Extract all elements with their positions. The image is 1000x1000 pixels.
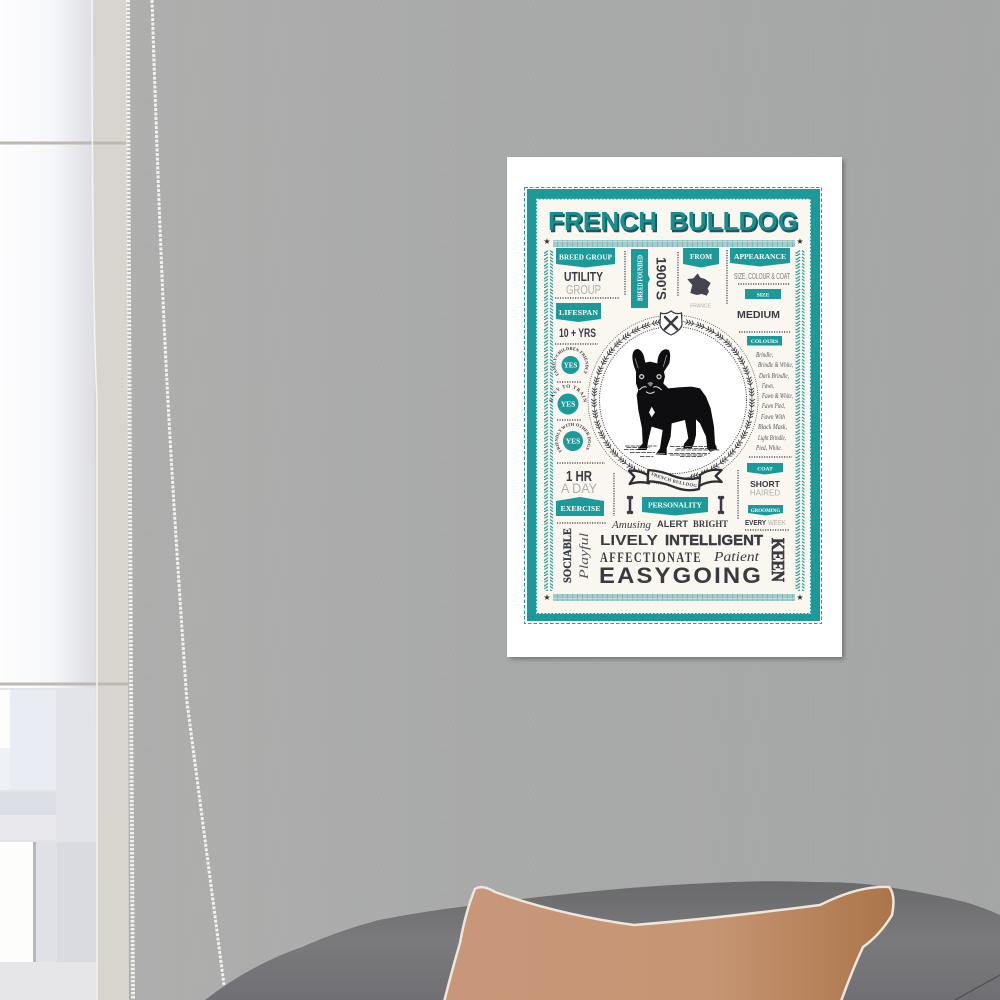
text: 1900s: 1900'S — [654, 257, 670, 300]
dog silhouette — [632, 349, 717, 455]
armchair — [205, 881, 1000, 1000]
ground hatching — [624, 446, 720, 457]
icon: left bone — [629, 499, 631, 511]
badge: family friendly: YES — [564, 362, 577, 370]
label: size — [745, 289, 781, 299]
word cloud: personality traits: SOCIABLE — [560, 528, 574, 583]
panel: poster — [507, 157, 842, 657]
text: short haired: HAIRED — [750, 488, 780, 498]
label: personality — [642, 497, 708, 516]
badge: easy to train — [549, 384, 587, 414]
text: 10 + yrs: 10 + YRS — [559, 326, 596, 340]
label: exercise — [556, 497, 604, 516]
star ornaments: ★ — [543, 237, 551, 246]
bottom stripe bar — [553, 594, 795, 601]
list: colours: Pied, White. — [755, 444, 782, 452]
ribbon: french bulldog — [628, 468, 723, 492]
map: france — [687, 273, 711, 310]
title: FRENCH — [550, 208, 658, 238]
map: france: FRANCE — [690, 304, 711, 310]
list: colours: Fawn With — [760, 413, 785, 421]
list: colours: Fawn & White, — [761, 392, 793, 400]
label: grooming: GROOMING — [751, 509, 780, 514]
text: utility group: GROUP — [566, 282, 601, 297]
label: breed founded — [631, 249, 650, 308]
word cloud: personality traits: Amusing — [611, 520, 651, 531]
label: lifespan — [556, 303, 601, 322]
label: coat — [747, 463, 783, 474]
icon: right bone — [720, 499, 722, 511]
text: exercise amount: 1 HR — [566, 468, 592, 485]
text: size colour coat: SIZE, COLOUR & COAT — [734, 272, 790, 281]
word cloud: personality traits: KEEN — [768, 538, 788, 582]
list: colours: Black Mask, — [758, 423, 787, 431]
label: lifespan: LIFESPAN — [559, 308, 599, 317]
poster shadow — [510, 160, 844, 659]
text: short haired — [750, 479, 781, 498]
illustration: french bulldog — [624, 349, 720, 457]
text: every week: EVERY — [745, 518, 766, 527]
badge: family friendly: FAMILY/CHILDREN FRIENDLY — [552, 347, 588, 376]
label: size: SIZE — [757, 292, 770, 298]
blind chains — [128, 0, 224, 1000]
list: colours: Brindle, — [756, 351, 773, 359]
laurel leaves — [591, 319, 755, 480]
label: colours: COLOURS — [751, 339, 778, 345]
laurel medallion — [588, 315, 758, 485]
label: appearance — [730, 248, 790, 266]
icon: shield with crossed bones — [660, 311, 682, 335]
title: FRENCH — [548, 206, 657, 236]
list: colours: Brindle & White, — [758, 361, 793, 369]
text: short haired: SHORT — [750, 479, 781, 489]
word cloud: personality traits: Patient — [713, 550, 760, 565]
label: from: FROM — [690, 252, 712, 261]
top stripe bar — [553, 240, 795, 247]
word cloud: personality traits: AFFECTIONATE — [600, 550, 702, 566]
cushion — [442, 887, 1000, 1000]
badge: easy to train: EASY TO TRAIN — [549, 384, 587, 402]
label: breed group: BREED GROUP — [559, 252, 612, 262]
label: grooming — [748, 505, 783, 516]
word cloud: personality traits: Playful — [576, 533, 591, 580]
cream inner panel — [537, 200, 810, 613]
label: from — [683, 248, 719, 268]
label: personality: PERSONALITY — [648, 500, 703, 510]
title: BULLDOG — [670, 208, 800, 238]
label: coat: COAT — [757, 466, 773, 472]
list: colours: Light Brindle, — [757, 434, 786, 442]
word cloud: personality traits — [560, 519, 788, 588]
badge: friendly with other dogs: YES — [566, 436, 580, 446]
star ornaments: ★ — [796, 593, 804, 602]
right chevron column — [796, 250, 804, 591]
word cloud: personality traits: BRIGHT — [693, 520, 729, 530]
text: every week — [745, 518, 786, 527]
title — [548, 206, 800, 238]
window with sheer curtain — [0, 0, 129, 1000]
ribbon: french bulldog: FRENCH BULLDOG — [651, 472, 697, 487]
label: exercise: EXERCISE — [560, 504, 600, 513]
text: medium: MEDIUM — [737, 310, 780, 321]
star ornaments: ★ — [543, 593, 551, 602]
badge: easy to train: YES — [561, 400, 575, 408]
label: breed group — [556, 248, 615, 268]
list: colours: Fawn Pied, — [761, 402, 785, 410]
word cloud: personality traits: ALERT — [657, 519, 688, 530]
word cloud: personality traits: LIVELY — [600, 532, 658, 549]
list: colours — [755, 351, 793, 452]
text: exercise amount: A DAY — [561, 480, 598, 496]
dog face and chest markings — [635, 355, 717, 453]
label: colours — [747, 336, 782, 346]
label: appearance: APPEARANCE — [734, 252, 786, 261]
badge: friendly with other dogs: FRIENDLY WITH OTHER DOGS — [555, 422, 591, 453]
word cloud: personality traits: INTELLIGENT — [665, 532, 763, 549]
dashed outer border — [524, 188, 822, 624]
word cloud: personality traits: EASYGOING — [599, 563, 763, 588]
bone ends right — [718, 496, 724, 514]
bone ends left — [627, 496, 633, 514]
teal frame — [527, 189, 820, 621]
dotted dividers — [555, 250, 792, 530]
left chevron column — [544, 250, 553, 591]
label: breed founded: BREED FOUNDED — [636, 255, 644, 301]
star ornaments: ★ — [796, 237, 804, 246]
text: exercise amount — [561, 468, 598, 496]
star ornaments — [543, 237, 804, 602]
list: colours: Dark Brindle, — [758, 372, 789, 380]
text: every week: WEEK — [768, 518, 786, 527]
text: utility group — [564, 269, 603, 297]
text: utility group: UTILITY — [564, 269, 603, 284]
list: colours: Fawn, — [761, 382, 774, 390]
title: BULLDOG — [669, 206, 798, 236]
